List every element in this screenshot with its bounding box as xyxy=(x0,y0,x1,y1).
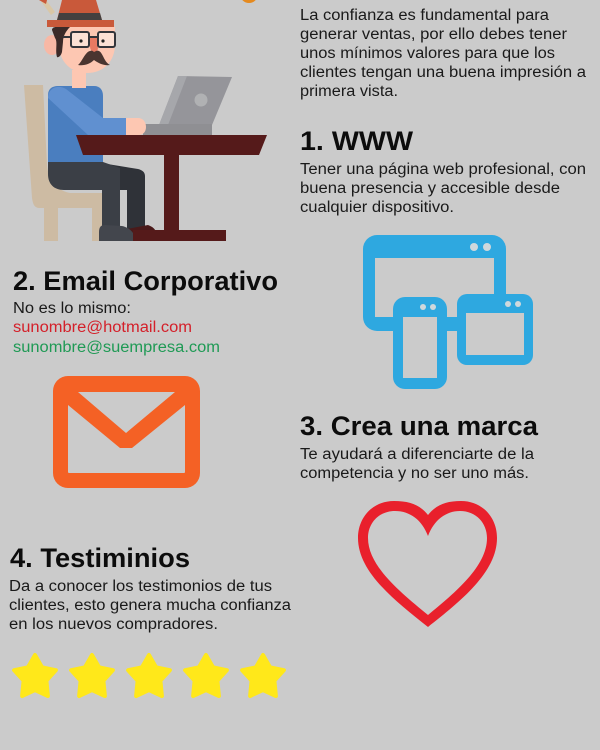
nose xyxy=(90,38,98,52)
text: www description xyxy=(300,161,586,216)
text: testimonials description: clientes, esto genera mucha confianza xyxy=(9,597,291,614)
intro text: unos mínimos valores para que los xyxy=(300,45,555,62)
intro text: La confianza es fundamental para xyxy=(300,7,549,24)
icon: responsive devices xyxy=(363,235,533,389)
head xyxy=(44,27,115,73)
text: email examples: sunombre@hotmail.com xyxy=(13,319,192,336)
text: www description: Tener una página web profesional, con xyxy=(300,161,586,178)
decorative orange circle xyxy=(240,0,258,3)
text: brand description: Te ayudará a diferenciarte de la xyxy=(300,446,534,463)
heading: 1. WWW: 1. WWW xyxy=(300,126,414,156)
glasses xyxy=(71,32,115,47)
icon: five stars xyxy=(14,655,284,696)
rear shoe xyxy=(127,225,156,241)
moustache xyxy=(78,51,110,65)
laptop xyxy=(143,76,232,135)
hand xyxy=(126,118,146,135)
text: brand description xyxy=(300,446,534,482)
front shoe xyxy=(99,225,136,241)
icon: envelope xyxy=(53,376,200,488)
neck xyxy=(72,70,86,88)
illustration: man working at laptop xyxy=(24,0,267,241)
table xyxy=(76,135,267,241)
heading: 3. Crea una marca: 3. Crea una marca xyxy=(300,411,539,441)
text: www description: buena presencia y accesible desde xyxy=(300,180,560,197)
text: testimonials description: en los nuevos compradores. xyxy=(9,616,218,633)
intro text: generar ventas, por ello debes tener xyxy=(300,26,567,43)
text: email examples xyxy=(13,300,220,356)
text: testimonials description xyxy=(9,578,291,633)
text: testimonials description: Da a conocer los testimonios de tus xyxy=(9,578,272,595)
heading: 2. Email Corporativo: 2. Email Corporativo xyxy=(13,266,278,296)
text: brand description: competencia y no ser uno más. xyxy=(300,465,529,482)
hat xyxy=(39,0,114,27)
torso xyxy=(48,86,103,162)
arm xyxy=(48,87,126,135)
front leg xyxy=(48,162,120,232)
intro text xyxy=(300,7,586,100)
text: email examples: sunombre@suempresa.com xyxy=(13,339,220,356)
text: www description: cualquier dispositivo. xyxy=(300,199,454,216)
rear leg xyxy=(95,162,145,232)
chair xyxy=(24,85,102,241)
intro text: clientes tengan una buena impresión a xyxy=(300,64,586,81)
icon: heart xyxy=(358,501,497,627)
text: email examples: No es lo mismo: xyxy=(13,300,131,317)
intro text: primera vista. xyxy=(300,83,398,100)
heading: 4. Testiminios: 4. Testiminios xyxy=(10,543,190,573)
